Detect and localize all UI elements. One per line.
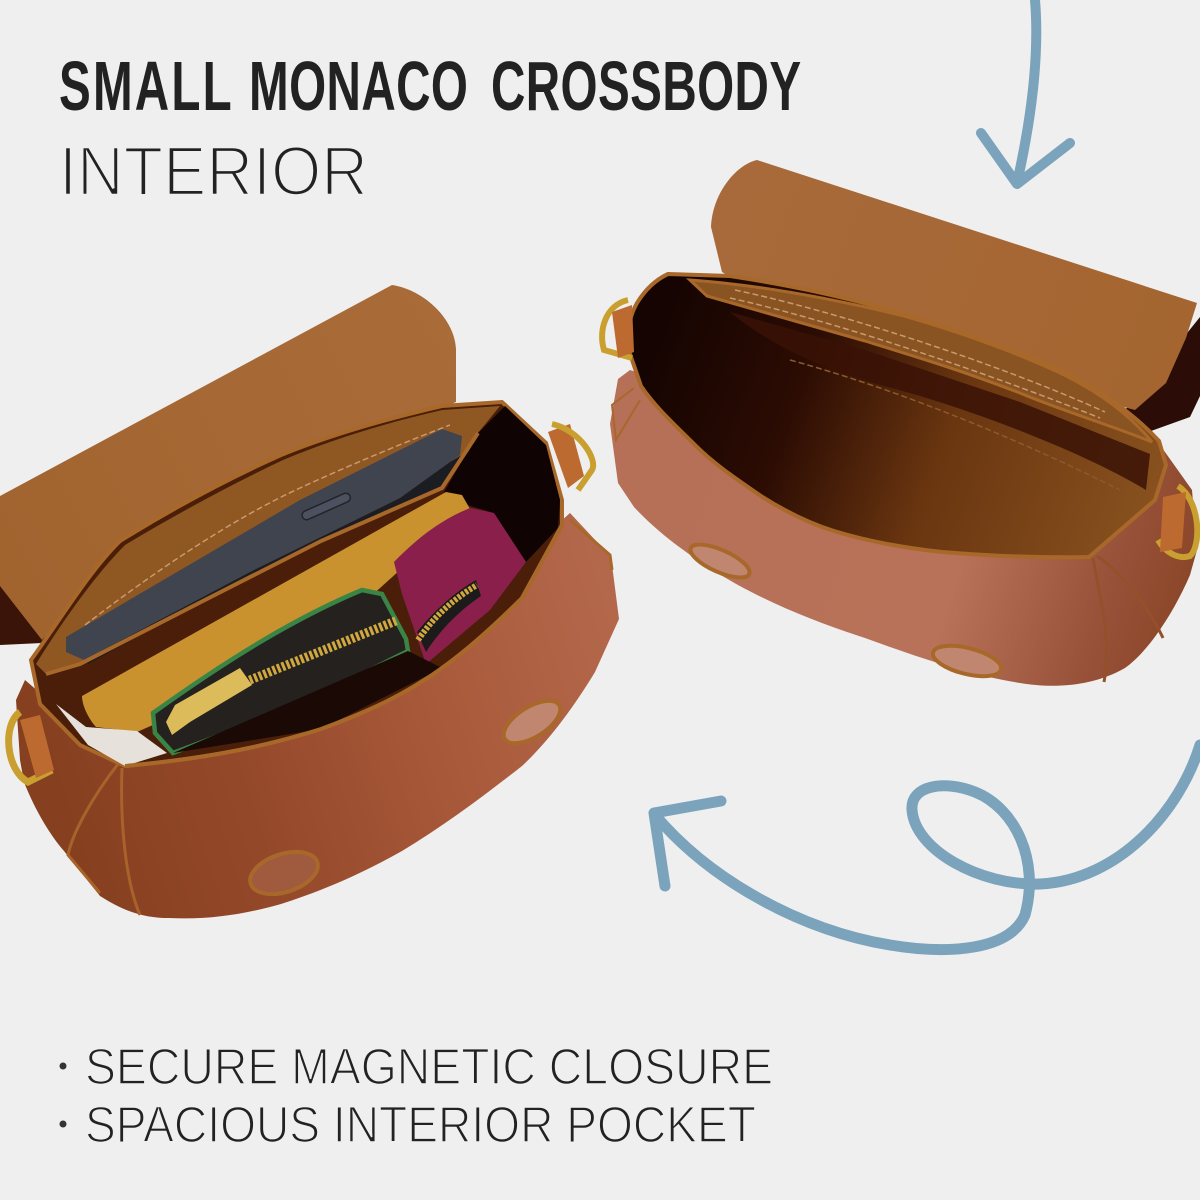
right bag flap underside <box>1125 317 1200 431</box>
title <box>59 47 801 210</box>
dark shadow under wallet <box>173 651 442 753</box>
bullet: spacious interior pocket: SPACIOUS INTERIOR POCKET <box>85 1096 756 1153</box>
item: yellow wallet <box>82 492 470 732</box>
left bag right buckle <box>548 424 593 490</box>
left bag flap underside <box>0 586 60 645</box>
dark interior depth <box>444 406 560 562</box>
left bag interior <box>31 402 562 766</box>
bullet: secure magnetic closure: SECURE MAGNETIC CLOSURE <box>85 1038 773 1095</box>
item: smartphone <box>66 429 470 664</box>
left bag: filled interior view <box>0 285 619 918</box>
title: MONACO <box>249 47 468 125</box>
title: CROSSBODY <box>491 47 801 125</box>
left bag seams <box>68 764 140 915</box>
item: green-trimmed zip wallet <box>153 590 408 753</box>
left bag suede pocket panel <box>36 406 500 674</box>
left bag body leather <box>16 513 619 918</box>
right bag right buckle <box>1158 486 1197 557</box>
item: white tissue <box>56 704 167 766</box>
right bag stitching <box>730 290 1120 490</box>
feature list <box>60 1038 773 1153</box>
subtitle: INTERIOR <box>59 132 368 210</box>
right bag seams <box>1093 556 1163 682</box>
right bag suede pocket panel <box>690 280 1152 442</box>
right bag interior <box>628 274 1166 557</box>
title: SMALL <box>59 47 232 125</box>
left bag magnet rings <box>245 692 567 902</box>
item: pink pouch <box>394 508 526 664</box>
right bag magnet rings <box>686 538 1004 682</box>
right bag: empty interior view <box>602 160 1200 686</box>
right bag shadow under pocket <box>730 312 1150 490</box>
arrow: top right pointing down to bag <box>981 0 1070 184</box>
left bag flap suede <box>0 285 456 640</box>
stitching on pocket <box>85 425 450 625</box>
arrow: looping arrow pointing left to bag <box>654 745 1200 950</box>
right bag flap suede <box>711 160 1197 410</box>
pocket stitch edge <box>46 433 478 674</box>
left bag left buckle <box>9 712 54 782</box>
left bag body front rim <box>125 525 562 766</box>
phone side button <box>301 492 352 521</box>
right bag body leather <box>610 370 1197 686</box>
right bag left buckle <box>602 300 634 358</box>
